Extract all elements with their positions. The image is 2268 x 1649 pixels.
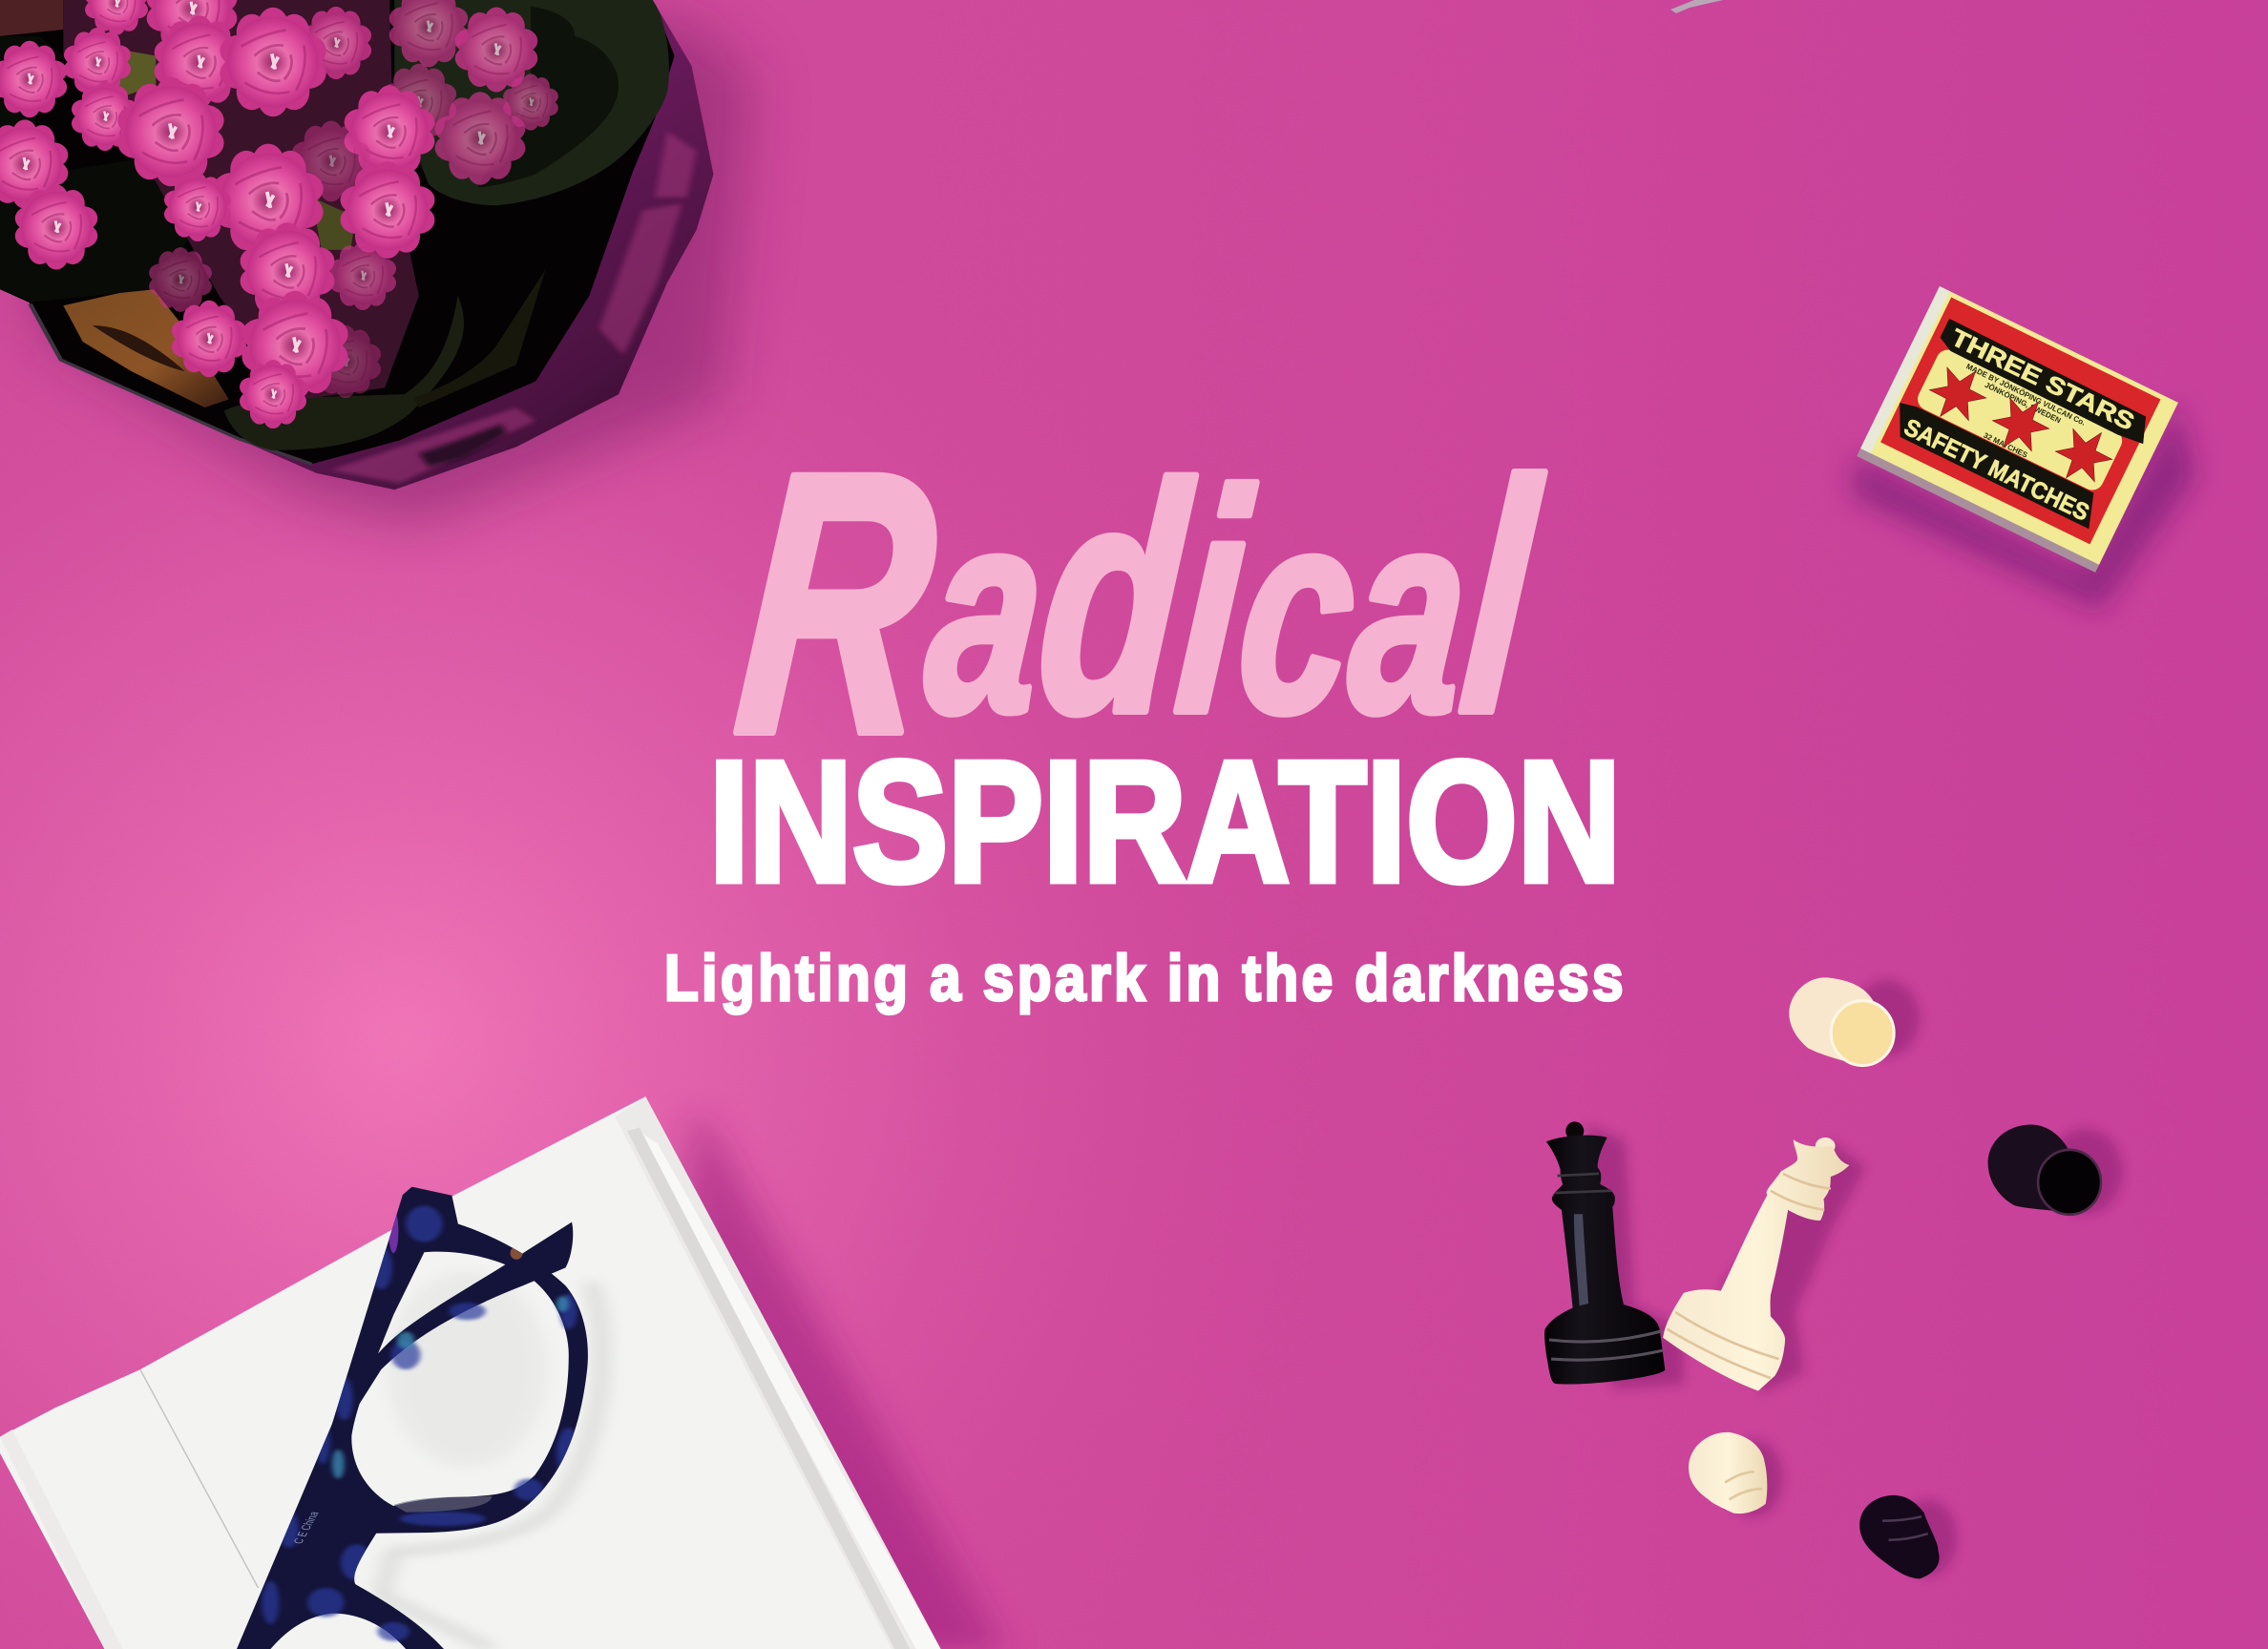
ivory pawn (1689, 1432, 1767, 1513)
flower pot (0, 0, 752, 525)
stars (1916, 351, 2126, 498)
pot reflections (331, 132, 697, 483)
ivory cup piece (1789, 977, 1894, 1066)
title: INSPIRATION: INSPIRATION (709, 726, 1621, 918)
fine print (1941, 362, 2087, 476)
temple print: C E China (291, 1511, 322, 1545)
pot body (0, 0, 713, 490)
subtitle: Lighting a spark in the darkness (664, 943, 1623, 1014)
title: Radical: dical (1027, 414, 1574, 782)
black cup piece (1988, 1125, 2102, 1215)
black queen (1544, 1121, 1665, 1385)
matchbox top-right stray object (1670, 0, 1723, 13)
shadows (1585, 980, 2123, 1576)
frame (237, 1187, 588, 1649)
glasses (237, 1187, 602, 1649)
black pawn (1859, 1495, 1940, 1578)
title: Radical: R (724, 395, 949, 811)
fine print: 32 MATCHES (1983, 431, 2029, 460)
label panel (1914, 346, 2126, 494)
leaves (394, 0, 669, 205)
title: Radical: a (916, 452, 1056, 772)
blossoms (0, 0, 558, 428)
nose pad shine (393, 1496, 492, 1513)
temple (335, 1222, 573, 1442)
fine print: JÖNKÖPING, SWEDEN (1984, 381, 2063, 425)
ivory queen (1663, 1138, 1849, 1391)
fine print: MADE BY JÖNKÖPING VULCAN Co. (1964, 362, 2087, 428)
banner: three stars: THREE STARS (1946, 324, 2138, 436)
banner: safety matches: SAFETY MATCHES (1900, 414, 2093, 527)
interior brown (63, 286, 229, 407)
chess pieces (1544, 977, 2123, 1578)
matchbox (1852, 286, 2195, 611)
book (0, 1096, 1002, 1649)
banner: three stars (1936, 319, 2155, 447)
tortoise mottling (262, 1205, 581, 1641)
